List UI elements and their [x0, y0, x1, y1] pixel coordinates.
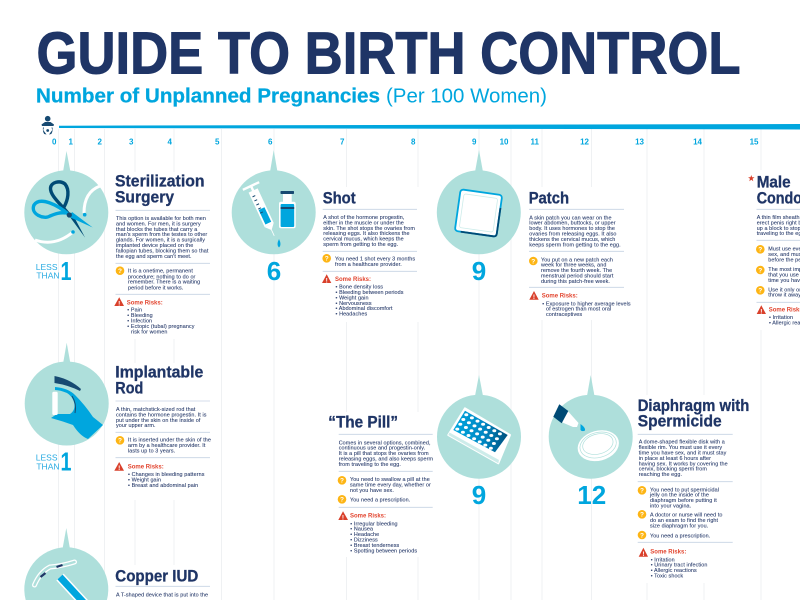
risks: of estrogen than most oral: [546, 307, 611, 313]
description: contains the hormone progestin. It is: [116, 412, 207, 418]
risks: Some Risks:: [127, 301, 163, 307]
risks: • Spotting between periods: [350, 548, 417, 554]
risks: • Breast and abdominal pain: [128, 483, 198, 489]
risks: [529, 291, 631, 318]
description: A skin patch you can wear on the: [529, 215, 612, 221]
panel: patch: [437, 150, 631, 318]
risks: • Headache: [350, 532, 379, 538]
notes: You need a prescription.: [650, 533, 710, 539]
number: less than 1: THAN: [36, 461, 60, 471]
risks: • Abdominal discomfort: [336, 306, 393, 312]
description: thickens the cervical mucus, which: [529, 237, 615, 243]
subtitle: (Per 100 Women): [386, 86, 547, 108]
note: lasts up to 3 years.: [128, 448, 175, 454]
axis scale numbers: 14: [693, 138, 703, 146]
panel: diaphragm with spermicide: [549, 375, 749, 580]
notes: do an exam to find the right: [650, 518, 719, 524]
description: skin. The shot stops the ovaries from: [323, 226, 415, 232]
risks: • Ectopic (tubal) pregnancy: [127, 324, 195, 330]
panel: male condom: [748, 174, 800, 326]
heading: Surgery: [115, 189, 175, 207]
risks: [338, 511, 417, 554]
description: implanted device placed on the: [116, 243, 193, 249]
risks: • Nausea: [350, 527, 373, 533]
risks: • Headaches: [336, 312, 367, 318]
axis scale numbers: 10: [500, 138, 509, 146]
note: period before it works.: [128, 285, 183, 291]
axis scale numbers: 12: [580, 138, 590, 146]
risks: • Irritation: [651, 557, 675, 563]
notes: A doctor or nurse will need to: [650, 513, 723, 519]
risks: !: [118, 465, 120, 472]
heading: [115, 364, 203, 398]
description: sperm from getting to the egg.: [323, 242, 398, 248]
risks: • Toxic shock: [651, 574, 683, 580]
risks: • Weight gain: [336, 295, 369, 301]
risks: • Exposure to higher average levels: [542, 301, 631, 307]
heading: Shot: [323, 189, 356, 207]
risks: !: [118, 300, 120, 307]
panel: implantable rod: [25, 343, 211, 489]
description: [116, 407, 207, 429]
note: remember. There is a waiting: [128, 280, 200, 286]
heading: Implantable: [115, 364, 203, 382]
risks: • Bone density loss: [336, 285, 383, 291]
number: less than 1: LESS: [36, 453, 58, 463]
heading: [115, 173, 204, 207]
note: [116, 436, 211, 454]
note: from a healthcare provider.: [335, 262, 402, 268]
description: releasing eggs, and also keeps sperm: [339, 456, 434, 462]
risks: • Changes in bleeding patterns: [128, 472, 205, 478]
description: keeps sperm from getting to the egg.: [529, 242, 621, 248]
risks: • Breast tenderness: [350, 543, 400, 549]
notes: jelly on the inside of the: [649, 493, 709, 499]
risks: [757, 305, 800, 326]
risks: • Urinary tract infection: [651, 563, 708, 569]
axis scale numbers: [52, 138, 759, 146]
note: ?: [118, 268, 122, 275]
panel: copper IUD: [24, 528, 210, 600]
heading: Male: [757, 174, 791, 192]
axis scale numbers: 3: [129, 138, 134, 146]
risks: [114, 297, 195, 335]
note: ?: [531, 258, 535, 265]
description: This option is available for both men: [116, 216, 206, 222]
number: less than 1: LESS: [36, 262, 58, 272]
icon: patch: [437, 150, 521, 254]
notes: ?: [758, 288, 762, 295]
number: less than 1: THAN: [36, 271, 60, 281]
axis scale numbers: 7: [340, 138, 345, 146]
description: your upper arm.: [116, 423, 156, 429]
notes: into your vagina.: [650, 504, 691, 510]
notes: not you have sex.: [350, 488, 394, 494]
number: less than 1: [36, 447, 72, 477]
panel: sterilization surgery: [24, 151, 210, 335]
description: A shot of the hormone progestin,: [323, 215, 405, 221]
risks: • Irritation: [769, 315, 793, 321]
note: procedure; nothing to do or: [128, 274, 196, 280]
risks: Some Risks:: [128, 465, 164, 471]
description: lower abdomen, buttocks, or upper: [529, 221, 616, 227]
description: [529, 215, 621, 248]
icon: baby: [42, 116, 54, 134]
notes: ?: [340, 478, 344, 485]
heading: Sterilization: [115, 173, 204, 191]
note: You put on a new patch each: [541, 257, 613, 263]
description: time you have sex, and it must stay: [639, 450, 727, 456]
risks: Some Risks:: [542, 294, 578, 300]
note: arm by a healthcare provider. It: [128, 443, 206, 449]
notes: ?: [640, 512, 644, 519]
notes: You need to swallow a pill at the: [350, 477, 430, 483]
axis scale numbers: 4: [168, 138, 173, 146]
description: [639, 440, 728, 478]
number: 6: 6: [267, 256, 281, 286]
notes: ?: [758, 247, 762, 254]
description: cervical mucus, which keeps the: [323, 237, 404, 243]
notes: ?: [758, 267, 762, 274]
description: A dome-shaped flexible disk with a: [639, 440, 725, 446]
risks: • Weight gain: [128, 477, 161, 483]
note: ?: [325, 256, 329, 263]
subtitle: Number of Unplanned Pregnancies: [36, 86, 380, 108]
icon: diaphragm and tube: [549, 375, 633, 479]
icon: IUD: [24, 528, 108, 600]
note: It is inserted under the skin of the: [128, 438, 211, 444]
axis scale numbers: 9: [472, 138, 477, 146]
heading: Patch: [529, 189, 569, 207]
note: [116, 266, 200, 291]
description: cervix, blocking sperm from: [639, 467, 707, 473]
icon: red star: [748, 175, 754, 181]
risks: !: [642, 551, 644, 558]
description: glands. For women, it is a surgically: [116, 238, 205, 244]
axis scale numbers: 11: [531, 138, 540, 146]
risks: !: [533, 294, 535, 301]
notes: diaphragm before putting it: [650, 498, 717, 504]
risks: [322, 274, 404, 318]
notes: You need to put spermicidal: [650, 487, 719, 493]
note: week for three weeks, and: [540, 263, 606, 269]
notes: [338, 476, 431, 504]
notes: [756, 245, 800, 299]
axis scale numbers: 15: [750, 138, 759, 146]
notes: You need a prescription.: [350, 498, 410, 504]
notes: ?: [640, 488, 644, 495]
description: It is a pill that stops the ovaries from: [339, 451, 429, 457]
risks: • Bleeding between periods: [336, 290, 404, 296]
subtitle: [36, 86, 547, 108]
note: [322, 254, 415, 268]
notes: ?: [640, 532, 644, 539]
description: [339, 440, 434, 468]
description: ovaries from releasing eggs. It also: [529, 232, 617, 238]
description: continuous use and progestin-only.: [339, 446, 425, 452]
risks: Some Risks:: [350, 513, 386, 519]
axis scale numbers: 6: [268, 138, 273, 146]
description: put under the skin on the inside of: [116, 418, 201, 424]
note: ?: [118, 438, 122, 445]
panel: the pill: [328, 375, 521, 554]
notes: [638, 486, 723, 539]
axis bar: [59, 124, 800, 130]
risks: !: [342, 514, 344, 521]
number: less than 1: 1: [60, 447, 72, 477]
description: from traveling to the egg.: [339, 462, 401, 468]
heading: Rod: [115, 380, 143, 398]
icon: hand holding rod: [25, 343, 109, 446]
risks: risk for women: [131, 329, 167, 335]
icon: scissors: [24, 151, 108, 254]
risks: Some Risks:: [335, 277, 371, 283]
risks: • Bleeding: [127, 313, 153, 319]
heading: “The Pill”: [328, 414, 398, 432]
risks: Some Risks:: [650, 550, 686, 556]
heading: Diaphragm with: [638, 397, 749, 415]
risks: [114, 462, 205, 489]
notes: size diaphragm for you.: [650, 524, 708, 530]
risks: • Nervousness: [336, 301, 372, 307]
note: during this patch-free week.: [541, 279, 610, 285]
heading: Spermicide: [638, 413, 722, 431]
axis scale numbers: 8: [411, 138, 416, 146]
axis scale numbers: 13: [635, 138, 645, 146]
description: body. It uses hormones to stop the: [529, 226, 615, 232]
risks: • Infection: [127, 318, 152, 324]
description: in place at least 6 hours after: [639, 456, 711, 462]
risks: • Allergic reactions: [651, 568, 697, 574]
notes: ?: [340, 497, 344, 504]
description: that blocks the tubes that carry a: [116, 227, 197, 233]
description: reaching the egg.: [639, 472, 682, 478]
note: It is a onetime, permanent: [128, 269, 193, 275]
note: remove the fourth week. The: [541, 268, 612, 274]
description: [757, 215, 800, 237]
risks: !: [326, 277, 328, 284]
description: fallopian tubes, blocking them so that: [116, 248, 209, 254]
note: menstrual period should start: [541, 273, 614, 279]
number: 9: 9: [472, 480, 486, 510]
risks: !: [760, 308, 762, 315]
description: [323, 215, 415, 248]
description: flexible rim. You must use it every: [639, 445, 722, 451]
description: A T-shaped device that is put into the: [116, 593, 208, 599]
description: A thin, matchstick-sized rod that: [116, 407, 196, 413]
axis scale numbers: 5: [215, 138, 220, 146]
icon: syringe and vial: [232, 150, 316, 254]
risks: [639, 548, 708, 580]
number: 12: 12: [577, 480, 606, 510]
number: 9: 9: [472, 256, 486, 286]
note: You need 1 shot every 3 months: [335, 257, 415, 263]
axis scale numbers: 1: [69, 138, 74, 146]
description: having sex. It works by covering the: [639, 461, 728, 467]
axis scale numbers: 0: [52, 138, 57, 146]
heading: [757, 174, 800, 207]
number: less than 1: 1: [60, 256, 72, 286]
heading: [638, 397, 749, 431]
icon: pill pack: [437, 375, 521, 479]
description: releasing eggs. It also thickens the: [323, 231, 410, 237]
description: the egg and sperm can't meet.: [116, 254, 192, 260]
axis scale numbers: 2: [98, 138, 103, 146]
description: either in the muscle or under the: [323, 220, 404, 226]
description: and women. For men, it is surgery: [116, 221, 201, 227]
notes: same time every day, whether or: [350, 482, 431, 488]
risks: • Irregular bleeding: [350, 521, 398, 527]
description: man's sperm from the testes to other: [116, 232, 207, 238]
risks: contraceptives: [546, 312, 582, 318]
heading: Copper IUD: [115, 568, 198, 586]
risks: • Pain: [127, 308, 142, 314]
risks: • Dizziness: [350, 538, 378, 544]
panel: shot: [232, 150, 417, 318]
note: [529, 257, 614, 285]
description: Comes in several options, combined,: [339, 440, 431, 446]
number: less than 1: [36, 256, 72, 286]
description: [116, 216, 209, 260]
